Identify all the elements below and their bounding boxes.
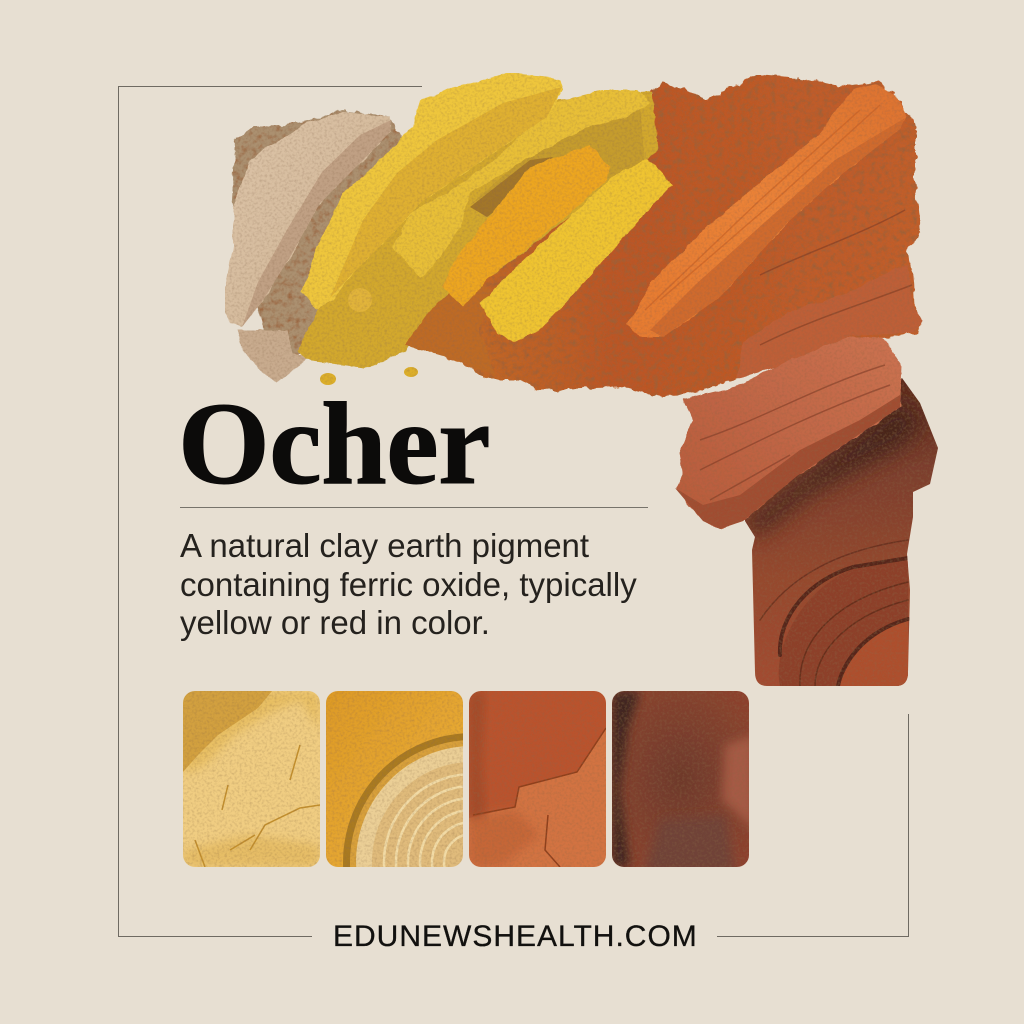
small tan rock — [237, 330, 310, 383]
frame line: top left — [118, 86, 422, 936]
big slab shaded side — [330, 87, 562, 298]
orange slab grain — [645, 105, 880, 310]
frame line: bottom right — [717, 714, 908, 936]
swatch 2: golden ochre — [326, 691, 463, 867]
description: containing ferric oxide, typically — [180, 566, 637, 602]
description: yellow or red in color. — [180, 604, 490, 641]
divider — [180, 506, 648, 508]
title: Ocher — [178, 378, 490, 509]
red powder wedge — [405, 275, 495, 375]
tan rock shaded side — [242, 120, 391, 327]
crack lines — [760, 540, 908, 686]
olive yellow powder — [470, 105, 645, 205]
swatch 1: pale yellow — [183, 691, 320, 867]
yellow rim slab — [393, 90, 650, 277]
terracotta slab lower side — [675, 395, 900, 529]
orange slab — [627, 84, 907, 337]
strata lines — [700, 210, 912, 500]
inner core — [838, 620, 908, 686]
under-slab shadow — [740, 400, 925, 535]
description: A natural clay earth pigment — [180, 527, 589, 564]
grey-brown grit — [232, 110, 410, 365]
terracotta slab — [675, 337, 902, 529]
crumb specks — [320, 288, 418, 385]
website footer: EDUNEWSHEALTH.COM — [333, 920, 698, 953]
pigment swath — [225, 73, 945, 690]
orange-red powder — [410, 74, 922, 397]
brown furrow — [470, 157, 553, 217]
swatch 4: dark brown — [612, 691, 755, 872]
swatch 3: terracotta — [469, 691, 606, 867]
upper red slab — [737, 264, 922, 378]
description — [180, 527, 637, 641]
orange slab shaded side — [650, 118, 905, 337]
bright yellow slab — [480, 158, 672, 342]
concentric crack bands — [779, 560, 908, 686]
orange-yellow slab — [442, 145, 610, 307]
yellow powder underlay — [298, 92, 658, 368]
dark red-brown base layer — [740, 370, 945, 690]
tan rock — [225, 112, 390, 327]
big yellow slab — [302, 73, 563, 310]
